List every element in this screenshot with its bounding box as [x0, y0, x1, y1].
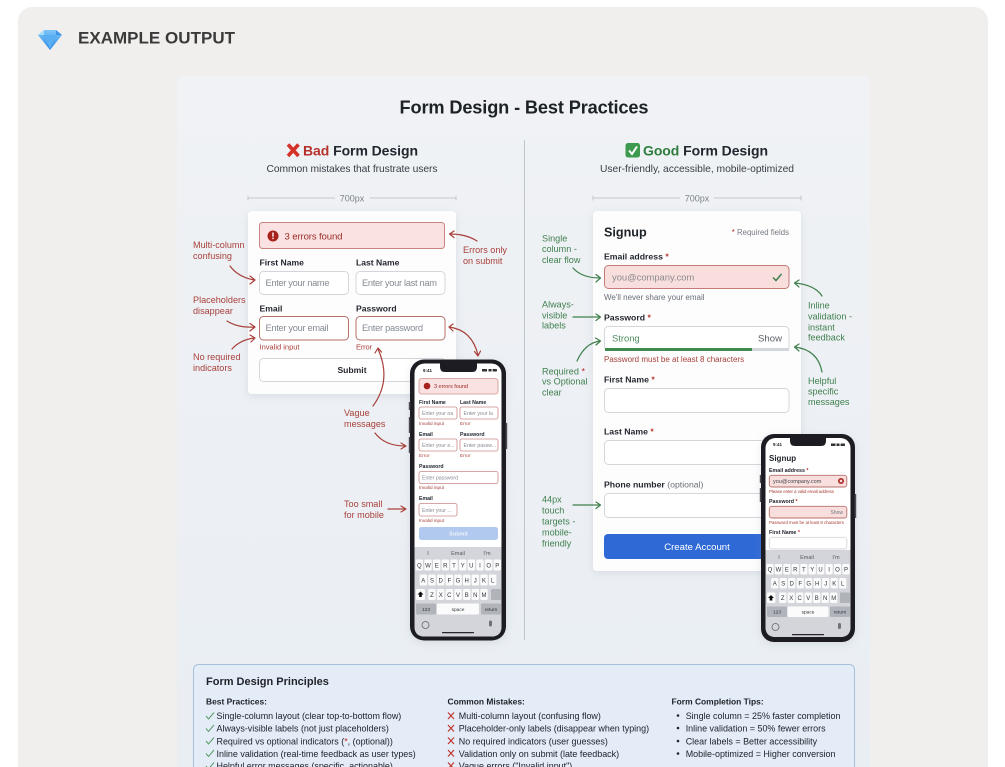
mobile keyboard: V — [456, 593, 460, 599]
list: best practices — [206, 696, 416, 767]
mobile keyboard: J — [824, 582, 827, 588]
icon: red cross — [288, 144, 298, 156]
mobile keyboard: C — [798, 596, 803, 602]
mobile keyboard: R — [793, 568, 798, 574]
mobile keyboard: P — [495, 563, 499, 569]
annotation: touch targets: mobile- — [542, 528, 572, 538]
mobile keyboard: E — [435, 563, 439, 569]
mobile keyboard: C — [447, 593, 452, 599]
mobile keyboard: N — [823, 596, 827, 602]
annotation: helpful specific messages — [794, 344, 850, 407]
mobile form fields: Password — [460, 432, 485, 438]
annotation: always-visible labels: labels — [542, 320, 566, 330]
annotation: multi-column confusing: confusing — [193, 251, 232, 261]
mobile keyboard: X — [789, 596, 793, 602]
panel background — [177, 76, 870, 767]
annotation: errors only on submit: Errors only — [463, 245, 507, 255]
field: email address: We'll never share your email — [604, 293, 705, 302]
annotation: touch targets: targets - — [542, 516, 575, 526]
annotation: inline validation: validation - — [808, 312, 852, 322]
submit button — [260, 358, 446, 382]
field: phone number — [604, 480, 789, 518]
status bar: 9:41 — [773, 442, 783, 447]
mobile keyboard — [414, 547, 502, 636]
annotation: touch targets: friendly — [542, 538, 572, 548]
mobile keyboard: Y — [810, 568, 814, 574]
mobile keyboard: 123 — [422, 607, 430, 613]
list: best practices: Single-column layout (clear top-to-bottom flow) — [216, 711, 401, 721]
subheading: User-friendly, accessible, mobile-optimized — [600, 164, 794, 175]
list: form completion tips: Inline validation = 50% fewer errors — [686, 724, 826, 734]
annotation: inline validation: feedback — [808, 332, 845, 342]
create account button — [604, 534, 789, 559]
notch — [440, 364, 477, 372]
icon: green check box — [626, 143, 640, 158]
annotation: required vs optional: clear — [542, 388, 562, 398]
mobile keyboard: I — [427, 551, 429, 557]
width ruler: bad form: 700px — [340, 194, 365, 204]
annotation: always-visible labels — [542, 300, 600, 330]
phone frame — [761, 434, 855, 642]
field: last name: Last Name * — [604, 426, 654, 436]
mobile keyboard: L — [841, 582, 845, 588]
annotation: always-visible labels: visible — [542, 310, 567, 320]
annotation: touch targets: 44px — [542, 494, 562, 504]
mobile form fields: Please enter a valid email address — [769, 489, 835, 494]
mobile form fields: Password — [419, 464, 444, 470]
annotation: required vs optional — [542, 338, 600, 398]
mobile form fields: Password * — [769, 499, 798, 505]
mobile form fields: Enter passw... — [464, 443, 496, 449]
panel: good form heading — [600, 142, 794, 175]
annotation: always-visible labels: Always- — [542, 300, 574, 310]
heading: example output: EXAMPLE OUTPUT — [78, 28, 236, 48]
mobile keyboard: U — [818, 568, 823, 574]
annotation: multi-column confusing: Multi-column — [193, 240, 245, 250]
mobile keyboard: L — [491, 578, 495, 584]
field: last name — [604, 426, 789, 464]
field: email: Enter your email — [266, 323, 328, 333]
list: common mistakes: Placeholder-only labels (disappear when typing) — [459, 724, 649, 734]
field: last name — [356, 258, 445, 294]
mobile keyboard: A — [421, 578, 425, 584]
mobile form fields: Invalid input — [419, 518, 445, 523]
mobile keyboard: B — [465, 593, 469, 599]
mobile keyboard: X — [439, 593, 443, 599]
annotation: multi-column confusing — [193, 240, 255, 284]
mobile form fields — [769, 468, 847, 549]
annotation: single column: column - — [542, 244, 577, 254]
mobile keyboard: A — [773, 582, 777, 588]
mobile keyboard: K — [832, 582, 836, 588]
mobile keyboard: D — [439, 578, 444, 584]
mobile keyboard: R — [443, 563, 448, 569]
annotation: placeholders disappear — [193, 295, 255, 331]
annotation: single column: clear flow — [542, 255, 581, 265]
mobile form fields: Enter your la — [464, 411, 493, 417]
phone: good form mobile — [760, 434, 856, 642]
mobile error banner — [419, 378, 498, 394]
required fields note: * Required fields — [732, 228, 789, 237]
mobile form fields: First Name * — [769, 530, 801, 536]
mobile keyboard: I — [479, 563, 481, 569]
mobile form fields: Enter your e... — [422, 443, 455, 449]
heading: bad form design: Bad Form Design — [303, 142, 418, 158]
list: common mistakes: Multi-column layout (confusing flow) — [459, 711, 601, 721]
mobile keyboard: H — [465, 578, 469, 584]
list: form completion tips: Form Completion Tips: — [672, 696, 764, 706]
mobile keyboard: M — [482, 593, 486, 599]
width ruler: bad form — [248, 194, 456, 204]
mobile error banner: 3 errors found — [434, 384, 468, 390]
mobile keyboard: W — [776, 568, 782, 574]
field: password: Password — [356, 304, 397, 314]
list: best practices: Best Practices: — [206, 696, 267, 706]
create account button: Create Account — [664, 542, 730, 553]
mobile keyboard: 123 — [773, 610, 781, 616]
mobile form fields: First Name — [419, 400, 446, 406]
mobile keyboard: space — [452, 608, 465, 613]
annotation: placeholders disappear: Placeholders — [193, 295, 246, 305]
mobile keyboard: M — [831, 596, 836, 602]
mobile keyboard: B — [815, 596, 819, 602]
list: best practices: Required vs optional indicators (*, (optional)) — [216, 736, 393, 746]
field: password: Password * — [604, 312, 651, 322]
annotation: helpful specific messages: specific — [808, 386, 839, 396]
annotation: errors only on submit — [450, 231, 507, 266]
mobile submit button: Submit — [449, 532, 468, 538]
infographic panel — [177, 76, 870, 767]
annotation: inline validation — [794, 280, 852, 342]
field: last name: Enter your last nam — [362, 278, 437, 288]
mobile keyboard: T — [802, 568, 806, 574]
phone: bad form mobile — [409, 360, 507, 640]
annotation: touch targets — [542, 494, 600, 548]
mobile form fields: Error — [460, 421, 471, 426]
field: email address: you@company.com — [612, 272, 694, 282]
mobile form fields: Error — [460, 453, 471, 458]
field: last name: Last Name — [356, 258, 400, 268]
status bar — [423, 368, 497, 373]
list: common mistakes: Validation only on submit (late feedback) — [459, 749, 619, 759]
submit button: Submit — [337, 365, 367, 375]
field: first name: First Name * — [604, 374, 655, 384]
field: first name — [260, 258, 348, 294]
annotation: single column: Single — [542, 234, 567, 244]
list: form completion tips: Single column = 25% faster completion — [686, 711, 840, 721]
annotation: required vs optional: vs Optional — [542, 376, 588, 386]
mobile keyboard — [766, 550, 850, 637]
mobile keyboard: return — [485, 607, 498, 613]
mobile keyboard: W — [425, 563, 431, 569]
annotation: no required indicators — [193, 335, 255, 373]
mobile keyboard: I'm — [483, 551, 491, 557]
field: email: Email — [260, 304, 282, 314]
field: first name — [604, 374, 789, 412]
mobile form fields: Email address * — [769, 468, 809, 474]
field: email address: Email address * — [604, 252, 669, 262]
mobile form fields: Email — [419, 496, 433, 502]
annotation: no required indicators: No required — [193, 352, 241, 362]
list: form completion tips: Clear labels = Better accessibility — [686, 736, 818, 746]
mobile keyboard: J — [474, 578, 477, 584]
mobile keyboard: Email — [800, 555, 814, 561]
mobile form fields: Enter your na — [422, 411, 453, 417]
field: first name: First Name — [260, 258, 304, 268]
panel: good form card — [593, 211, 801, 571]
field: email address — [604, 252, 789, 302]
field: password: Enter password — [362, 323, 423, 333]
mobile keyboard: F — [447, 578, 451, 584]
annotation: required vs optional: Required * — [542, 366, 585, 376]
mobile keyboard: P — [844, 568, 848, 574]
list: common mistakes: Common Mistakes: — [448, 696, 525, 706]
mobile form fields: you@company.com — [773, 479, 822, 485]
mobile form fields: Email — [419, 432, 433, 438]
mobile keyboard: I'm — [832, 555, 840, 561]
mobile form fields: Password must be at least 8 characters — [769, 520, 845, 525]
field: password: Show — [758, 334, 782, 344]
mobile keyboard: Z — [781, 596, 785, 602]
mobile keyboard: Q — [417, 563, 422, 569]
annotation: single column — [542, 234, 600, 282]
mobile form fields: Error — [419, 453, 430, 458]
mobile keyboard: G — [806, 582, 811, 588]
mobile form fields: Enter your ... — [422, 508, 452, 514]
field: email: Invalid input — [260, 342, 300, 352]
annotation: placeholders disappear: disappear — [193, 306, 233, 316]
mobile form title: Signup — [769, 454, 796, 463]
width ruler: good form — [593, 194, 801, 204]
list: best practices: Always-visible labels (not just placeholders) — [216, 724, 389, 734]
field: password — [604, 312, 789, 364]
mobile keyboard: S — [430, 578, 434, 584]
list: best practices: Inline validation (real-time feedback as user types) — [216, 749, 416, 759]
annotation: too small for mobile — [344, 499, 406, 520]
field: first name: Enter your name — [266, 278, 330, 288]
panel: bad form heading — [266, 142, 438, 175]
icon: diamond — [38, 30, 62, 50]
error banner: 3 errors found — [284, 232, 342, 242]
annotation: vague messages — [344, 348, 406, 449]
annotation: vague messages: messages — [344, 419, 386, 429]
mobile keyboard: return — [834, 610, 847, 616]
mobile keyboard: V — [806, 596, 810, 602]
principles heading: Form Design Principles — [206, 676, 329, 688]
mobile keyboard: O — [835, 568, 840, 574]
annotation: too small for mobile: for mobile — [344, 510, 384, 520]
annotation: vague messages: Vague — [344, 408, 370, 418]
heading: good form design: Good Form Design — [643, 142, 768, 158]
column divider — [524, 140, 526, 640]
field: password — [356, 304, 445, 352]
mobile keyboard: K — [482, 578, 486, 584]
mobile form fields: Show — [830, 510, 843, 516]
notch — [790, 438, 826, 446]
phone frame — [410, 360, 506, 640]
mobile keyboard: N — [473, 593, 477, 599]
annotation: too small for mobile: Too small — [344, 499, 382, 509]
field: password: Error — [356, 342, 372, 352]
mobile keyboard: H — [815, 582, 819, 588]
mobile keyboard: T — [452, 563, 456, 569]
list: form completion tips — [672, 696, 840, 759]
mobile keyboard: Email — [451, 551, 465, 557]
mobile keyboard: Q — [768, 568, 773, 574]
mobile keyboard: F — [798, 582, 802, 588]
status bar: 9:41 — [423, 368, 433, 373]
mobile keyboard: D — [790, 582, 795, 588]
mobile form fields: Enter password — [422, 476, 458, 482]
field: password: Strong — [612, 332, 640, 344]
mobile keyboard: space — [802, 610, 815, 616]
mobile keyboard: O — [486, 563, 491, 569]
phone screen — [766, 438, 850, 637]
annotation: touch targets: touch — [542, 506, 564, 516]
annotation: no required indicators: indicators — [193, 363, 232, 373]
mobile keyboard: S — [781, 582, 785, 588]
error banner — [260, 222, 444, 248]
mobile form fields: Invalid input — [419, 485, 445, 490]
title: Form Design - Best Practices — [400, 98, 648, 118]
annotation: inline validation: Inline — [808, 300, 830, 310]
mobile keyboard: Y — [461, 563, 465, 569]
panel: form design principles — [194, 664, 854, 767]
subheading: Common mistakes that frustrate users — [266, 164, 438, 175]
field: phone number: Phone number (optional) — [604, 480, 704, 490]
annotation: helpful specific messages: messages — [808, 397, 850, 407]
list: form completion tips: Mobile-optimized = Higher conversion — [686, 749, 836, 759]
status bar — [773, 442, 845, 447]
mobile form fields: Last Name — [460, 400, 486, 406]
annotation: inline validation: instant — [808, 322, 835, 332]
list: common mistakes: No required indicators (user guesses) — [459, 736, 608, 746]
mobile keyboard: I — [778, 555, 780, 561]
list: common mistakes — [448, 696, 649, 767]
width ruler: good form: 700px — [685, 194, 710, 204]
mobile submit button — [419, 527, 498, 540]
mobile keyboard: U — [469, 563, 473, 569]
mobile form fields — [419, 400, 498, 523]
mobile keyboard: E — [785, 568, 789, 574]
mobile keyboard: I — [828, 568, 830, 574]
panel: bad form card — [248, 211, 456, 394]
annotation: helpful specific messages: Helpful — [808, 376, 836, 386]
arrow: password to phone — [449, 324, 480, 356]
field: password: Password must be at least 8 characters — [604, 355, 744, 364]
mobile keyboard: G — [456, 578, 461, 584]
annotation: errors only on submit: on submit — [463, 256, 503, 266]
mobile keyboard: Z — [430, 593, 434, 599]
form title: Signup — [604, 226, 647, 240]
phone screen — [414, 364, 502, 636]
field: email — [260, 304, 348, 352]
mobile form fields: Invalid input — [419, 421, 445, 426]
